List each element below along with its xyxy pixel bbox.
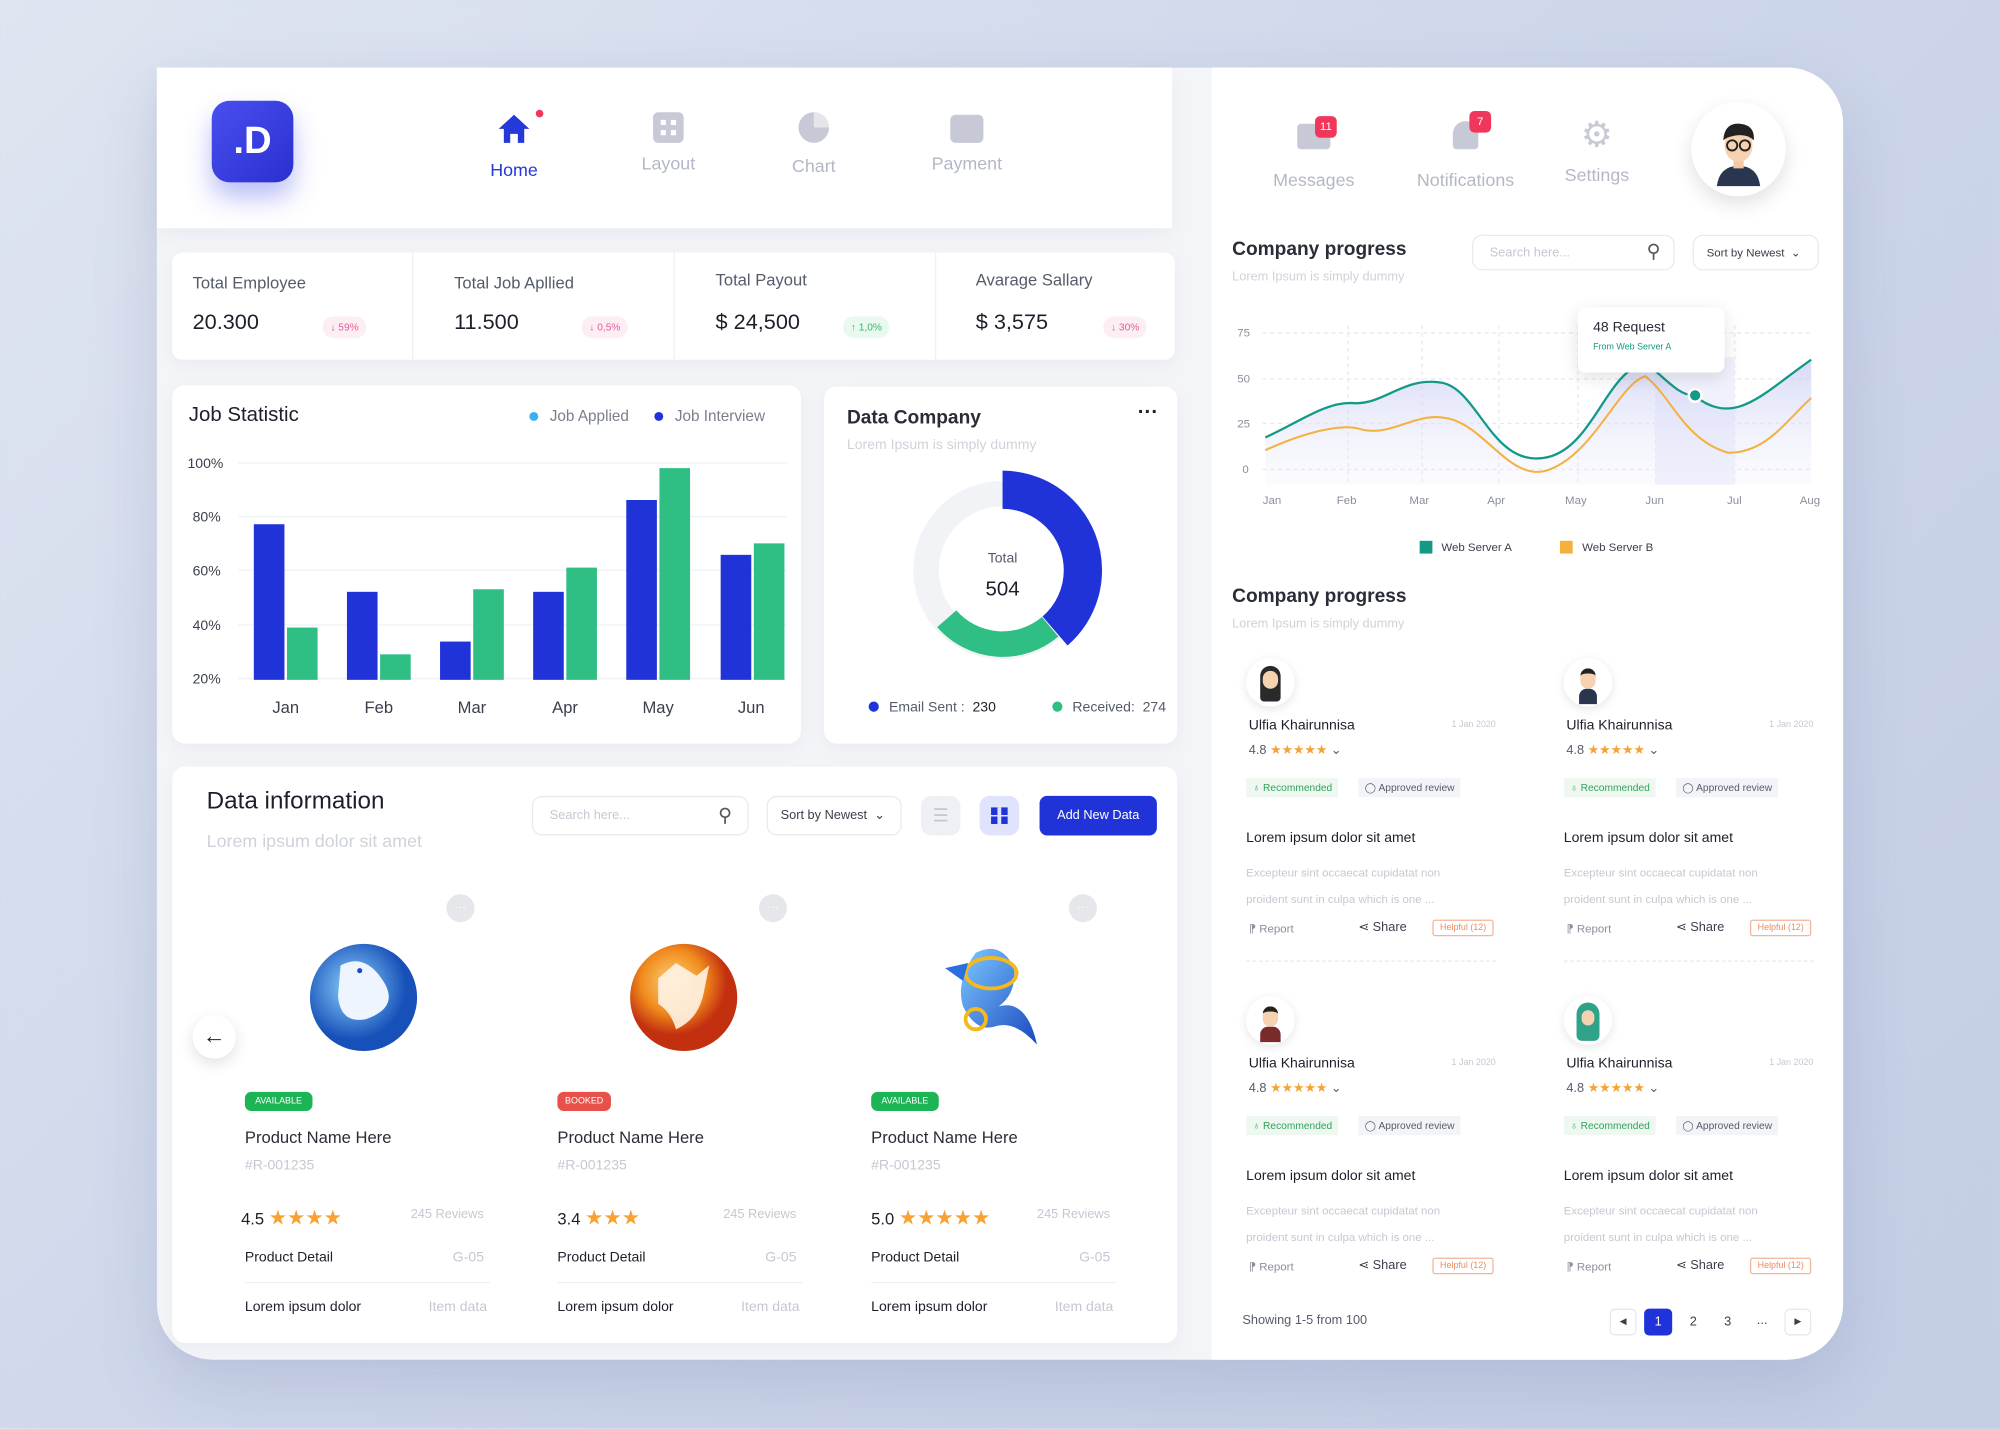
product card 1: Lorem ipsum dolor: [245, 1300, 361, 1315]
tooltip: 48 request: [1578, 307, 1724, 372]
line chart: Jul: [1727, 495, 1742, 507]
icon: messages: [1273, 116, 1354, 190]
review card 3: 1 Jan 2020: [1452, 1059, 1496, 1068]
text: Lorem Ipsum is simply dummy: [1232, 617, 1404, 631]
review card 2: ⁋ Report: [1566, 922, 1611, 935]
product card 2: Product Detail: [557, 1250, 646, 1265]
review card 4: 1 Jan 2020: [1769, 1059, 1813, 1068]
nav: Home: [490, 110, 544, 180]
product card 2: BOOKED: [565, 1097, 603, 1106]
stats row: [172, 253, 1175, 360]
review card 1: 4.8 ★★★★★ ⌄: [1249, 744, 1341, 758]
search box right: Search here...: [1490, 246, 1570, 260]
icon: notifications: [1417, 111, 1514, 190]
review card 4: ⁋ Report: [1566, 1260, 1611, 1273]
review card 4: Helpful (12): [1758, 1261, 1804, 1270]
reviews heading: Company progress: [1232, 585, 1407, 607]
search box right: [1472, 235, 1675, 270]
product card 3: Item data: [1055, 1300, 1113, 1315]
nav: Home: Home: [490, 159, 538, 180]
sort right: [1693, 235, 1819, 270]
heading: Job Statistic: [189, 404, 299, 426]
bar chart: 20%: [193, 671, 221, 687]
stat: average salary: $ 3,575: [976, 310, 1048, 334]
icon: settings: Settings: [1565, 165, 1629, 185]
line chart: 25: [1237, 418, 1250, 430]
review card 4: ⋖ Share: [1676, 1259, 1724, 1273]
bar chart: Mar: [458, 698, 487, 717]
product card 1: AVAILABLE: [255, 1097, 302, 1106]
stat: total job applied: 11.500: [454, 310, 519, 334]
line chart: May: [1565, 495, 1587, 507]
donut chart: 504: [986, 579, 1020, 601]
avatar: user profile: [1691, 102, 1786, 196]
product card 3: [871, 894, 1116, 1315]
back arrow: [193, 1015, 236, 1059]
panel: data company: ···: [1138, 402, 1158, 423]
bar chart: Apr: [552, 698, 578, 717]
panel: data information: Lorem ipsum dolor sit amet: [207, 830, 422, 851]
review card 2: Ulfia Khairunnisa: [1566, 718, 1672, 733]
sort: [767, 796, 902, 835]
pagination footer: Showing 1-5 from 100: [1242, 1314, 1367, 1328]
review card 4: ◯ Approved review: [1682, 1120, 1772, 1131]
product card 1: Item data: [429, 1300, 487, 1315]
line chart: Aug: [1800, 495, 1820, 507]
icon: blue fish logo: [945, 948, 1037, 1044]
review card 2: 1 Jan 2020: [1769, 721, 1813, 730]
bar chart: Feb: [365, 698, 393, 717]
search box right: ⚲: [1647, 241, 1661, 263]
heading: Data Company: [847, 407, 981, 429]
product card 3: G-05: [1079, 1250, 1110, 1265]
product card 2: 245 Reviews: [723, 1208, 796, 1222]
review card 1: Ulfia Khairunnisa: [1249, 718, 1355, 733]
pagination: ◀: [1620, 1318, 1627, 1327]
line chart: [1237, 325, 1820, 507]
icon: settings: ⚙: [1581, 115, 1613, 154]
product card 3: 245 Reviews: [1037, 1208, 1110, 1222]
add new data button: [1040, 796, 1157, 835]
review card 1: ♁ Recommended: [1253, 782, 1332, 793]
stat: average salary: [976, 270, 1146, 338]
review card 2: ⋖ Share: [1676, 921, 1724, 935]
dashboard frame: [157, 68, 1843, 1360]
sort right: Sort by Newest ⌄: [1707, 246, 1800, 259]
product card 3: #R-001235: [871, 1158, 941, 1173]
search: [532, 796, 749, 835]
stat: total job applied: [454, 273, 628, 338]
panel: job statistic: [172, 385, 801, 744]
review card 1: Helpful (12): [1440, 923, 1486, 932]
icon: messages: Messages: [1273, 170, 1354, 190]
line chart: Mar: [1409, 495, 1429, 507]
review card 3: Ulfia Khairunnisa: [1249, 1056, 1355, 1071]
product card 1: 4.5 ★★★★: [241, 1208, 342, 1230]
line chart: Jan: [1263, 495, 1281, 507]
line chart: 75: [1237, 328, 1250, 340]
product card 2: [557, 894, 802, 1315]
review card 1: ⋖ Share: [1358, 921, 1407, 935]
logo: [212, 101, 293, 182]
review card 3: Lorem ipsum dolor sit amet: [1246, 1168, 1415, 1184]
bar chart: [187, 455, 787, 717]
product card 2: #R-001235: [557, 1158, 627, 1173]
product card 3: Product Detail: [871, 1250, 959, 1265]
review card 4: [1562, 1002, 1813, 1274]
product card 1: 245 Reviews: [411, 1208, 484, 1222]
nav: Chart: [792, 112, 836, 176]
review card 1: 1 Jan 2020: [1452, 721, 1496, 730]
product card 2: Product Name Here: [557, 1128, 704, 1147]
right header icons: [1273, 111, 1629, 190]
donut chart: [914, 470, 1102, 660]
product card 2: ···: [767, 901, 779, 913]
line chart: 50: [1237, 374, 1250, 386]
line chart legend: Web Server A Web Server B: [1441, 541, 1653, 554]
bar chart: May: [642, 698, 675, 717]
view toggles: ☰: [933, 805, 949, 825]
donut chart: Total: [988, 549, 1017, 565]
stat: total payout: $ 24,500: [716, 310, 800, 334]
product card 3: Product Name Here: [871, 1128, 1018, 1147]
bar chart: 40%: [193, 617, 221, 633]
tooltip: 48 request: 48 Request: [1593, 320, 1665, 335]
product card 3: 5.0 ★★★★★: [871, 1208, 990, 1230]
review card 4: Excepteur sint occaecat cupidatat non proident sunt in culpa which is one ...: [1564, 1204, 1758, 1244]
review card 3: Helpful (12): [1440, 1261, 1486, 1270]
product card 2: G-05: [765, 1250, 797, 1265]
nav: Chart: Chart: [792, 156, 836, 176]
product card 1: ···: [455, 901, 466, 913]
icon: messages: 11: [1320, 120, 1332, 133]
review card 1: Excepteur sint occaecat cupidatat non proident sunt in culpa which is one ...: [1246, 866, 1440, 906]
review card 4: Lorem ipsum dolor sit amet: [1564, 1168, 1733, 1184]
view toggles: [921, 796, 960, 835]
review card 2: ◯ Approved review: [1682, 782, 1772, 793]
product card 3: Lorem ipsum dolor: [871, 1300, 987, 1315]
line chart: Apr: [1487, 495, 1505, 507]
donut legend: Email Sent : 230 Received: 274: [889, 700, 1166, 716]
product card 2: Item data: [741, 1300, 800, 1315]
tooltip: 48 request: From Web Server A: [1593, 343, 1671, 352]
bar chart: 100%: [187, 455, 223, 471]
icon: settings: [1565, 115, 1629, 185]
panel: data information: [172, 767, 1177, 1343]
review card 2: 4.8 ★★★★★ ⌄: [1566, 744, 1659, 758]
right panel background: [1212, 68, 1843, 1360]
product card 2: Lorem ipsum dolor: [557, 1300, 674, 1315]
nav: Payment: Payment: [932, 153, 1002, 173]
line chart: Feb: [1337, 495, 1357, 507]
review card 3: Excepteur sint occaecat cupidatat non proident sunt in culpa which is one ...: [1246, 1204, 1440, 1244]
legend: Job Applied Job Interview: [550, 407, 765, 425]
review card 4: ♁ Recommended: [1570, 1120, 1650, 1131]
pagination: 2: [1690, 1315, 1697, 1329]
heading: Data information: [207, 788, 384, 815]
add new data button: Add New Data: [1057, 809, 1139, 823]
product card 3: AVAILABLE: [881, 1097, 928, 1106]
pagination: ▶: [1794, 1318, 1801, 1327]
review card 3: 4.8 ★★★★★ ⌄: [1249, 1082, 1341, 1096]
review card 4: Ulfia Khairunnisa: [1566, 1056, 1672, 1071]
stat: average salary: ↓ 30%: [1111, 321, 1139, 333]
stat: total employee: Total Employee: [193, 273, 306, 292]
review card 3: ⁋ Report: [1249, 1260, 1294, 1273]
search: ⚲: [718, 805, 732, 827]
stat: total payout: Total Payout: [716, 270, 807, 290]
product card 1: Product Name Here: [245, 1128, 391, 1147]
icon: blue bird logo: [310, 944, 418, 1051]
product card 3: ···: [1077, 901, 1089, 913]
icon: notifications: 7: [1477, 115, 1483, 128]
pagination: 3: [1724, 1315, 1731, 1329]
pagination: 1: [1655, 1315, 1662, 1329]
pagination: ...: [1757, 1314, 1767, 1328]
stat: total payout: ↑ 1,0%: [851, 321, 882, 333]
nav: Payment: [932, 114, 1002, 173]
logo: .D: [233, 120, 272, 162]
review card 1: ◯ Approved review: [1365, 782, 1454, 793]
icon: fox logo: [630, 944, 738, 1051]
pagination: [1610, 1308, 1812, 1336]
review card 1: Lorem ipsum dolor sit amet: [1246, 830, 1415, 846]
product card 1: Product Detail: [245, 1250, 333, 1265]
panel: data company: [824, 386, 1177, 744]
stat: total employee: [193, 273, 366, 338]
review card 4: 4.8 ★★★★★ ⌄: [1566, 1082, 1659, 1096]
review card 1: [1244, 666, 1496, 962]
nav: Layout: Layout: [642, 153, 695, 173]
sort: Sort by Newest ⌄: [781, 809, 885, 823]
search: Search here...: [550, 809, 630, 823]
stat: total job applied: ↓ 0,5%: [589, 321, 620, 333]
bar chart: Jan: [272, 698, 299, 717]
review card 2: Lorem ipsum dolor sit amet: [1564, 830, 1733, 846]
product card 1: #R-001235: [245, 1158, 314, 1173]
line chart: Jun: [1645, 495, 1664, 507]
review card 2: Excepteur sint occaecat cupidatat non proident sunt in culpa which is one ...: [1564, 866, 1758, 906]
company progress chart heading: Company progress: [1232, 239, 1407, 260]
review card 3: ◯ Approved review: [1365, 1120, 1454, 1131]
product card 1: [241, 894, 490, 1315]
bar chart: 80%: [193, 509, 221, 525]
text: Lorem Ipsum is simply dummy: [1232, 270, 1404, 284]
stat: total employee: ↓ 59%: [330, 321, 359, 333]
line chart: 0: [1242, 464, 1249, 476]
review card 2: [1562, 668, 1814, 962]
review card 3: ⋖ Share: [1358, 1259, 1407, 1273]
review card 3: [1244, 1006, 1496, 1274]
bar chart: Jun: [738, 698, 765, 717]
nav: Layout: [642, 112, 696, 173]
stat: total employee: 20.300: [193, 310, 259, 334]
stat: average salary: Avarage Sallary: [976, 270, 1093, 290]
review card 2: Helpful (12): [1758, 923, 1804, 932]
product card 1: G-05: [453, 1250, 484, 1265]
stat: total job applied: Total Job Apllied: [454, 273, 574, 292]
icon: notifications: Notifications: [1417, 170, 1514, 190]
review card 2: ♁ Recommended: [1570, 782, 1650, 793]
bar chart: 60%: [193, 562, 221, 578]
top nav bar: [157, 68, 1172, 228]
review card 1: ⁋ Report: [1249, 922, 1294, 935]
product card 2: 3.4 ★★★: [557, 1208, 640, 1230]
review card 3: ♁ Recommended: [1253, 1120, 1332, 1131]
stat: total payout: [716, 270, 889, 338]
back arrow: ←: [203, 1023, 226, 1048]
panel: data company: Lorem Ipsum is simply dummy: [847, 437, 1036, 453]
